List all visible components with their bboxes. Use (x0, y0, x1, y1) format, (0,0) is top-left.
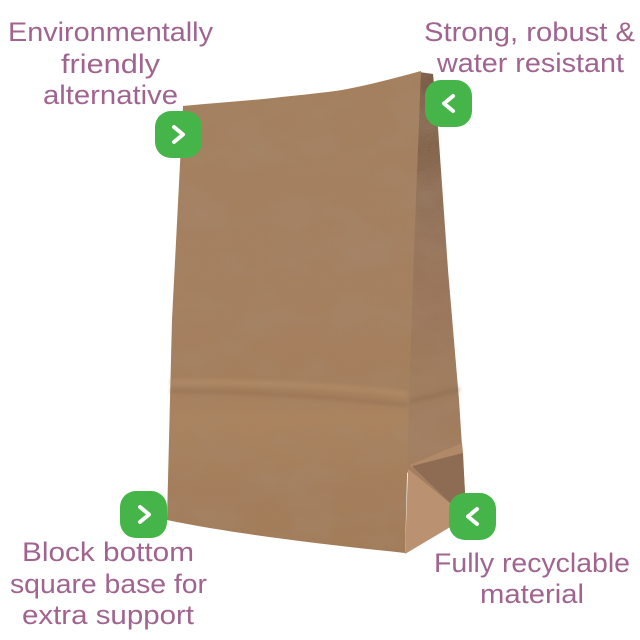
label text: Fully recyclable (434, 548, 630, 578)
callout: environmentally friendly (8, 17, 214, 158)
bag front panel (167, 71, 421, 553)
bottom fold: light gusset (405, 469, 452, 554)
icon: left chevron badge (425, 80, 472, 127)
icon: right chevron badge (155, 111, 202, 158)
label text: Environmentally (8, 17, 214, 47)
label text: Strong, robust & (424, 17, 635, 47)
horizontal crease (170, 391, 408, 405)
callout: block bottom (10, 491, 207, 630)
label text: friendly (61, 49, 161, 79)
label text: material (480, 579, 584, 609)
label text (10, 537, 207, 630)
label text: Block bottom (22, 537, 194, 567)
bottom fold: light band above gusset (410, 443, 463, 468)
label text: alternative (43, 80, 178, 110)
callout: fully recyclable (434, 493, 630, 609)
icon: right chevron badge (120, 491, 167, 538)
bottom fold: shadowed gusset (412, 453, 465, 503)
bag back panel and side gusset (405, 72, 465, 512)
label text: square base for (10, 569, 207, 599)
label text (424, 17, 635, 78)
paper bag (167, 71, 465, 554)
label text: extra support (22, 600, 195, 630)
callout: strong and water resistant (424, 17, 635, 127)
label text (8, 17, 214, 110)
label text: water resistant (436, 48, 625, 78)
icon: left chevron badge (449, 493, 496, 540)
label text (434, 548, 630, 609)
